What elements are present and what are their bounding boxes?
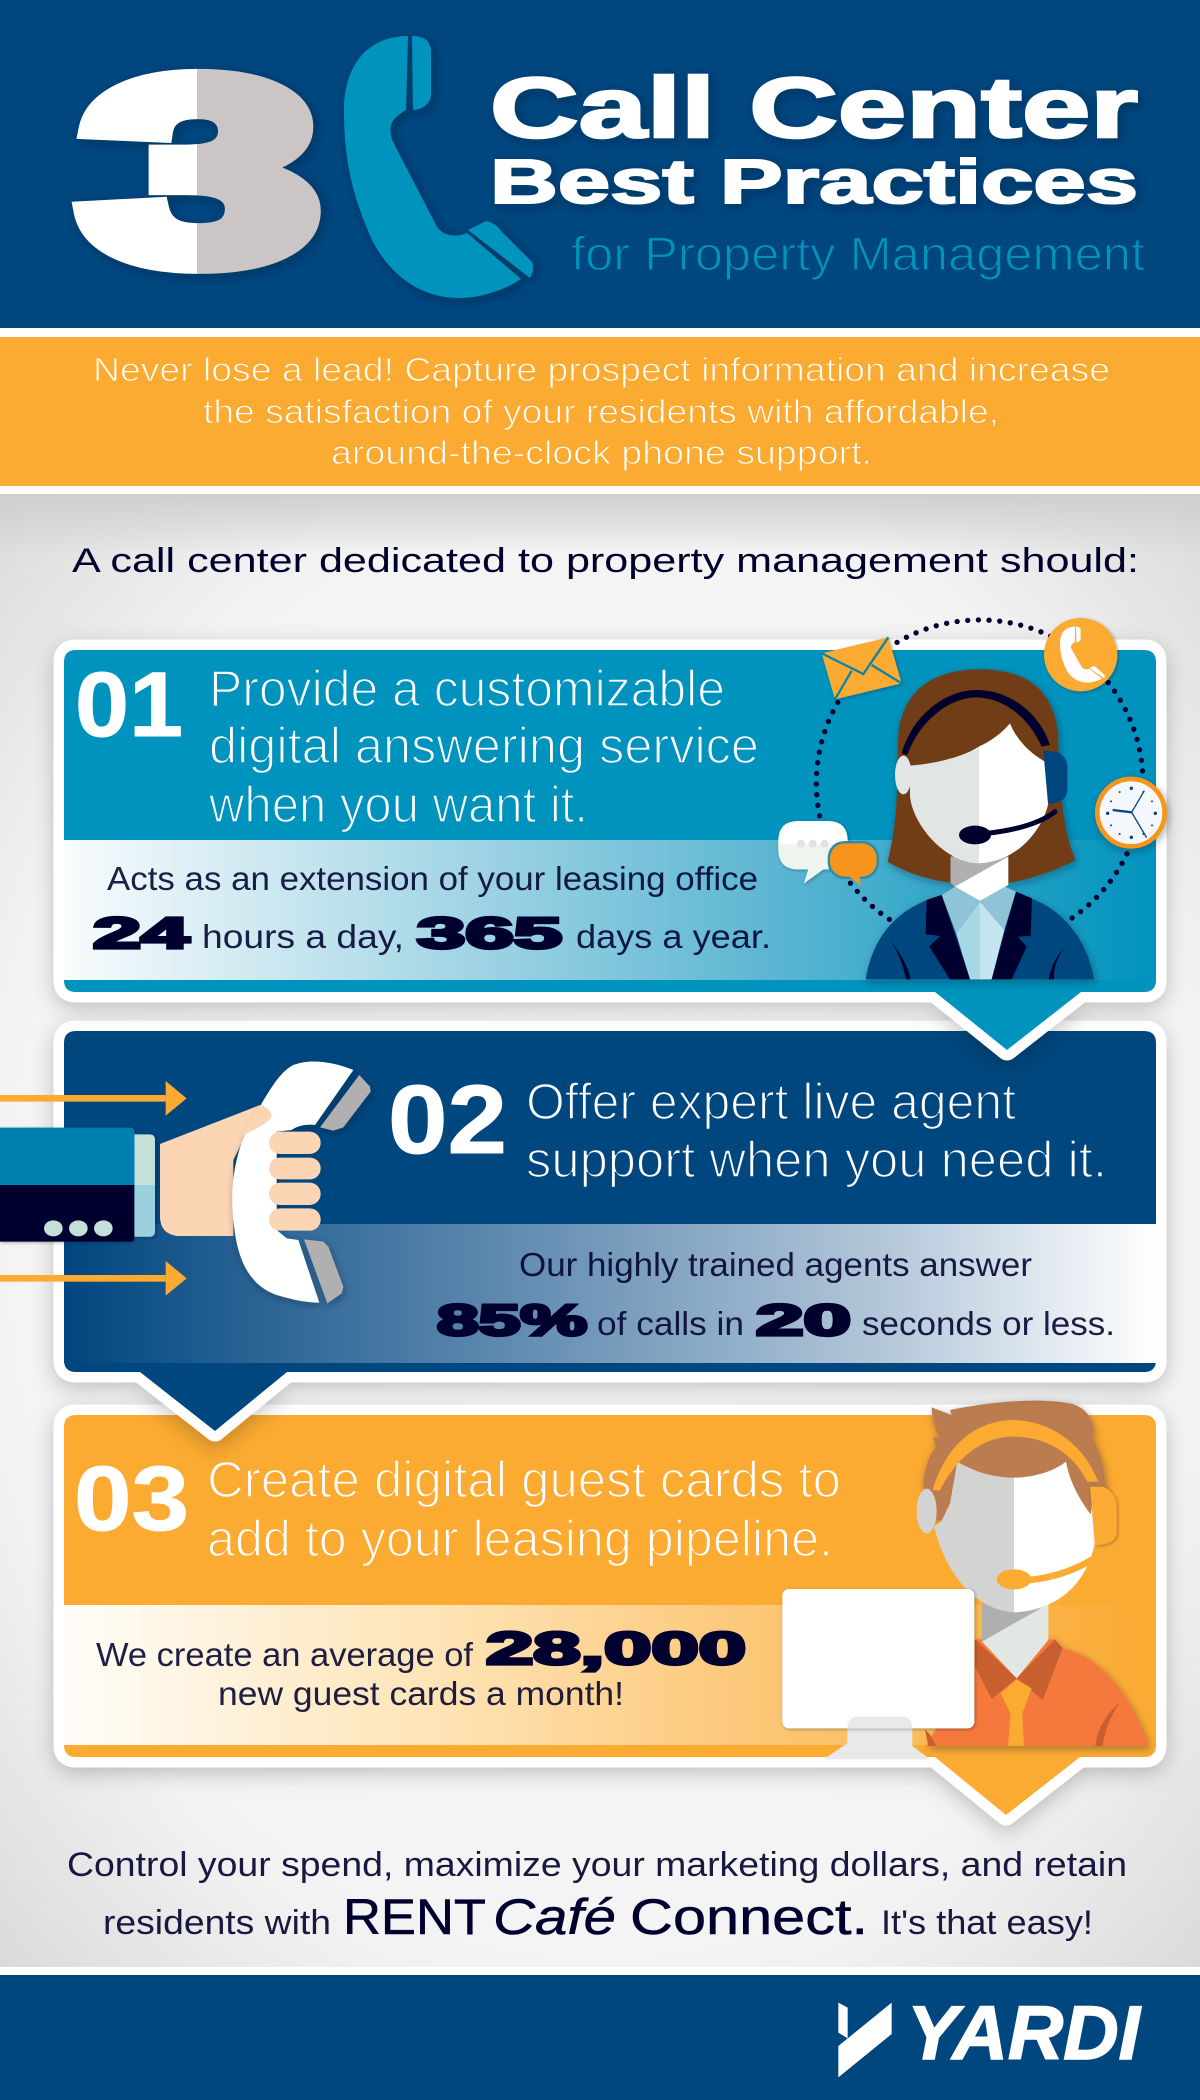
footer band: [0, 1967, 1200, 2100]
stat text: [96, 1623, 746, 1712]
intro text: around-the-clock phone support.: [331, 434, 872, 471]
brand name: Connect.: [630, 1889, 868, 1945]
header band: [0, 0, 1200, 328]
stat text: [437, 1246, 1115, 1345]
closing statement: It's that easy!: [881, 1904, 1093, 1942]
intro band: [0, 328, 1200, 494]
stat text: 85%: [437, 1296, 587, 1345]
illustration: female agent with contact icons: [778, 618, 1165, 979]
step heading: [526, 1073, 1107, 1188]
brand name: [343, 1889, 868, 1945]
panel: 02 live agent support: [0, 1031, 1156, 1431]
stat text: new guest cards a month!: [218, 1675, 624, 1712]
icon: Yardi mark: [838, 2003, 892, 2077]
sleeve: [0, 1128, 155, 1242]
icon: computer monitor: [782, 1589, 974, 1759]
stat text: 365: [417, 909, 562, 958]
stat text: We create an average of: [96, 1636, 474, 1673]
step heading: [207, 1451, 841, 1567]
illustration: male agent at monitor: [782, 1401, 1149, 1759]
title: Call Center: [490, 61, 1138, 156]
stat text: 24: [93, 909, 190, 958]
big numeral 3: 3: [82, 26, 318, 315]
stat text: 28,000: [486, 1623, 746, 1674]
stat text: Our highly trained agents answer: [519, 1246, 1032, 1283]
title: [490, 61, 1138, 217]
intro text: [93, 351, 1110, 471]
icon: chat bubbles: [778, 821, 879, 885]
brand name: RENT: [343, 1889, 486, 1945]
icon: wall clock: [1097, 779, 1165, 846]
step heading: add to your leasing pipeline.: [207, 1510, 833, 1567]
callout band: [64, 1224, 1156, 1363]
callout band: [64, 840, 1156, 980]
step heading: digital answering service: [209, 717, 759, 774]
closing statement: [67, 1846, 1127, 1945]
stat text: hours a day,: [202, 918, 404, 955]
callout band: [64, 1605, 1156, 1745]
stat text: Acts as an extension of your leasing office: [107, 860, 758, 897]
panel: 03 guest cards: [64, 1401, 1156, 1815]
icon: telephone handset: [344, 36, 533, 298]
illustration: hand holding phone with arrows: [0, 1061, 371, 1303]
section heading: A call center dedicated to property management should:: [72, 542, 1139, 580]
brand name: Café: [493, 1889, 616, 1945]
step number: 03: [74, 1448, 189, 1550]
step number: 01: [75, 654, 183, 756]
stat text: seconds or less.: [862, 1305, 1115, 1342]
step heading: support when you need it.: [526, 1131, 1107, 1188]
stat text: [93, 860, 771, 958]
subtitle: for Property Management: [571, 227, 1145, 280]
title: Best Practices: [490, 148, 1138, 217]
arrow: lower: [0, 1261, 187, 1296]
step heading: [208, 660, 759, 833]
logo wordmark: YARDI: [907, 1991, 1142, 2076]
stat text: of calls in: [597, 1305, 744, 1342]
stat text: days a year.: [576, 918, 771, 955]
intro text: the satisfaction of your residents with affordable,: [203, 393, 999, 430]
arrow: upper: [0, 1081, 187, 1116]
icon: envelope: [822, 637, 902, 699]
intro text: Never lose a lead! Capture prospect information and increase: [93, 351, 1110, 388]
icon: phone badge: [1044, 618, 1117, 691]
closing statement: Control your spend, maximize your marketing dollars, and retain: [67, 1846, 1127, 1884]
stat text: 20: [756, 1296, 851, 1345]
step heading: Offer expert live agent: [526, 1073, 1016, 1130]
step heading: Provide a customizable: [209, 660, 725, 717]
closing statement: residents with: [103, 1904, 331, 1942]
step heading: Create digital guest cards to: [207, 1451, 841, 1508]
page background: [0, 490, 1200, 1970]
panel: 01 answering service: [64, 618, 1165, 1050]
step heading: when you want it.: [208, 776, 588, 833]
step number: 02: [388, 1065, 507, 1174]
